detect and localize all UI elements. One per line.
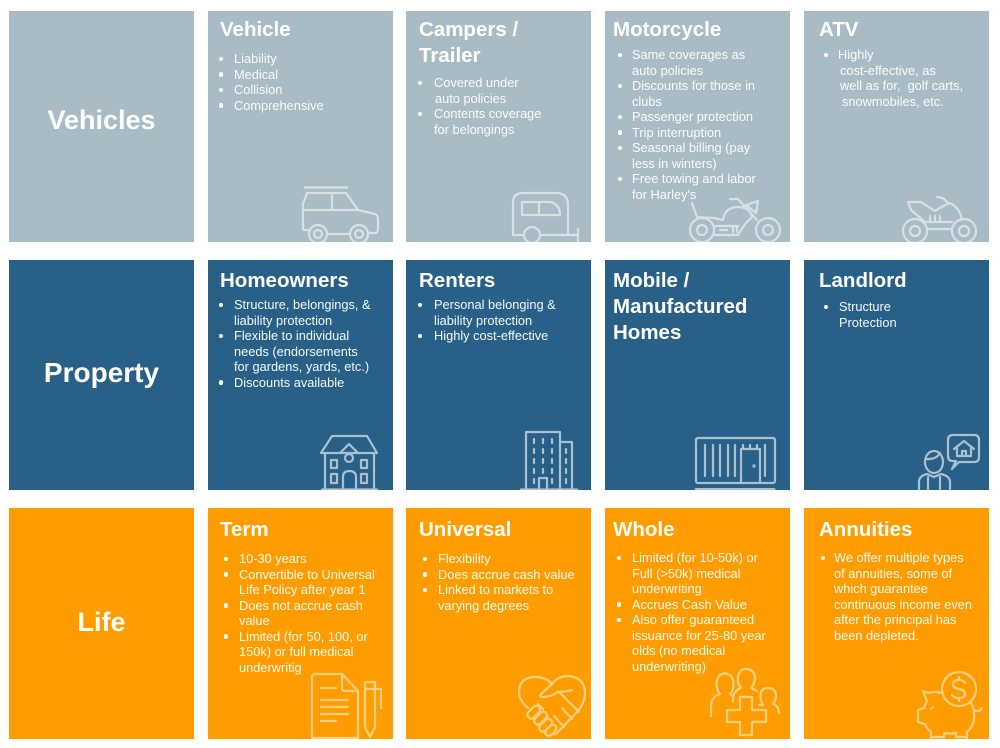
list: Renters coverages — [418, 297, 556, 343]
list: Term coverages: 10-30 years — [239, 551, 307, 566]
panel: Renters — [406, 260, 591, 490]
list: Annuities description: continuous income even — [834, 596, 972, 612]
row label: Life: Life — [77, 607, 126, 637]
list: Homeowners coverages: liability protection — [234, 312, 332, 328]
list: Annuities description: after the principal has — [834, 612, 956, 627]
list: Vehicle coverages: Collision — [234, 82, 282, 97]
panel: Annuities — [804, 508, 989, 739]
panel: Landlord — [804, 260, 989, 490]
list: Motorcycle coverages: Discounts for those in — [632, 78, 755, 93]
list: ATV coverages: snowmobiles, etc. — [842, 94, 944, 108]
list: Homeowners coverages: Flexible to individual — [234, 328, 349, 343]
list: Annuities description: of annuities, some of — [834, 566, 952, 580]
icon: motorcycle — [689, 198, 781, 242]
list: Term coverages: Convertible to Universal — [239, 566, 375, 582]
list: Term coverages: underwritig — [239, 660, 302, 674]
list: Term coverages: value — [239, 613, 270, 628]
heading: Universal: Universal — [419, 518, 511, 541]
icon: apartment building — [520, 430, 578, 490]
icon: manufactured home — [694, 436, 776, 490]
list: Term coverages: 150k) or full medical — [239, 644, 354, 659]
row label: Life — [9, 508, 194, 739]
list: Term coverages: Does not accrue cash — [239, 598, 363, 612]
list: Vehicle coverages: Comprehensive — [234, 98, 324, 112]
list: Motorcycle coverages: less in winters) — [632, 156, 717, 170]
panel: Term — [208, 508, 393, 739]
list: Universal coverages: Linked to markets to — [438, 582, 553, 597]
list: Motorcycle coverages: Free towing and labor — [632, 171, 756, 186]
list: Whole coverages — [617, 550, 766, 674]
list: Motorcycle coverages: for Harley's — [632, 186, 696, 202]
icon: handshake heart — [518, 674, 586, 738]
list: Motorcycle coverages — [618, 47, 756, 202]
list: ATV coverages: well as for, golf carts, — [840, 78, 963, 93]
panel: Mobile / Manufactured Homes — [605, 260, 790, 490]
heading: Whole: Whole — [613, 518, 674, 541]
heading: Landlord: Landlord — [819, 269, 907, 292]
icon: car — [302, 186, 380, 242]
heading: Motorcycle: Motorcycle — [613, 18, 721, 41]
icon: family with medical cross — [710, 668, 780, 736]
list: Vehicle coverages — [219, 51, 324, 112]
list: Motorcycle coverages: Trip interruption — [632, 124, 721, 140]
list: Term coverages: Life Policy after year 1 — [239, 582, 366, 597]
panel: Campers / Trailer — [406, 11, 591, 242]
list: Landlord coverages: Protection — [839, 314, 897, 330]
list: Whole coverages: Limited (for 10-50k) or — [632, 550, 758, 565]
list: Renters coverages: Highly cost-effective — [434, 328, 548, 343]
list: Homeowners coverages — [219, 297, 371, 390]
list: Landlord coverages — [824, 299, 897, 330]
list: Whole coverages: olds (no medical — [632, 643, 725, 658]
list: Vehicle coverages: Medical — [234, 66, 278, 82]
list: Renters coverages: Personal belonging & — [434, 297, 556, 312]
list: Universal coverages — [423, 551, 575, 612]
list: Motorcycle coverages: Seasonal billing (pay — [632, 140, 750, 155]
heading: Annuities: Annuities — [819, 518, 912, 541]
list: ATV coverages: cost-effective, as — [840, 62, 936, 78]
list: Whole coverages: underwriting — [632, 581, 702, 596]
list: Homeowners coverages: Discounts available — [234, 374, 344, 390]
icon: document and pen — [310, 672, 382, 739]
list: Whole coverages: Also offer guaranteed — [632, 612, 754, 627]
list: Universal coverages: varying degrees — [438, 598, 529, 612]
list: Universal coverages: Flexibility — [438, 551, 491, 566]
panel: ATV — [804, 11, 989, 242]
list: Campers coverages: Contents coverage — [434, 106, 541, 121]
panel: Vehicle — [208, 11, 393, 242]
list: Vehicle coverages: Liability — [234, 51, 277, 66]
list: Annuities description — [821, 550, 972, 642]
list: Renters coverages: liability protection — [434, 312, 532, 328]
list: Motorcycle coverages: auto policies — [632, 62, 703, 78]
icon: ATV — [902, 196, 977, 242]
heading: Vehicle: Vehicle — [220, 18, 291, 41]
list: Campers coverages: for belongings — [434, 122, 514, 136]
list: Landlord coverages: Structure — [839, 299, 891, 314]
list: Campers coverages — [418, 75, 541, 136]
heading: Renters: Renters — [419, 269, 495, 292]
list: Annuities description: been depleted. — [834, 628, 919, 642]
list: Homeowners coverages: Structure, belongings, & — [234, 297, 371, 312]
heading: ATV: ATV — [819, 18, 858, 41]
list: ATV coverages: Highly — [838, 47, 874, 62]
panel: Whole — [605, 508, 790, 739]
list: Universal coverages: Does accrue cash value — [438, 566, 575, 582]
icon: piggy bank with dollar coin — [916, 670, 984, 739]
list: ATV coverages — [824, 47, 963, 108]
list: Motorcycle coverages: Passenger protection — [632, 109, 753, 124]
panel: Universal — [406, 508, 591, 739]
list: Term coverages: Limited (for 50, 100, or — [239, 628, 368, 644]
heading: Term: Term — [220, 518, 269, 541]
list: Motorcycle coverages: Same coverages as — [632, 47, 745, 62]
heading: Campers / Trailer: Campers / Trailer — [419, 18, 518, 67]
list: Campers coverages: Covered under — [434, 75, 519, 90]
list: Homeowners coverages: needs (endorsements — [234, 344, 358, 358]
list: Whole coverages: Full (>50k) medical — [632, 566, 740, 580]
list: Whole coverages: issuance for 25-80 year — [632, 628, 766, 642]
list: Homeowners coverages: for gardens, yards, etc.) — [234, 359, 369, 374]
panel: Homeowners — [208, 260, 393, 490]
list: Whole coverages: Accrues Cash Value — [632, 596, 747, 612]
list: Whole coverages: underwriting) — [632, 658, 706, 674]
icon: camper trailer — [512, 192, 580, 242]
row label: Vehicles — [9, 11, 194, 242]
icon: house — [320, 434, 378, 490]
row label: Property — [9, 260, 194, 490]
list: Campers coverages: auto policies — [435, 90, 506, 106]
list: Annuities description: We offer multiple types — [834, 550, 964, 565]
row label: Property: Property — [44, 357, 159, 388]
heading: Mobile / Manufactured Homes: Mobile / Manufactured Homes — [613, 269, 747, 344]
row label: Vehicles: Vehicles — [47, 105, 156, 135]
panel: Motorcycle — [605, 11, 790, 242]
icon: landlord with house speech bubble — [918, 434, 980, 490]
heading: Homeowners: Homeowners — [220, 269, 349, 292]
list: Term coverages — [224, 551, 375, 674]
list: Motorcycle coverages: clubs — [632, 94, 662, 108]
list: Annuities description: which guarantee — [834, 581, 928, 596]
